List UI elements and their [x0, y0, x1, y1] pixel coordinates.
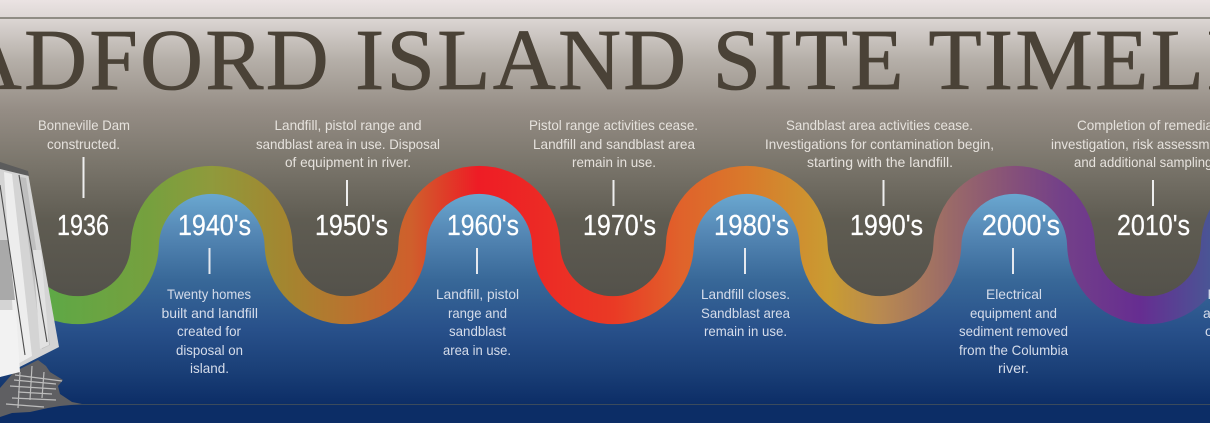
description 1970's: Landfill and sandblast area [533, 136, 695, 152]
description 1960's: range and [448, 305, 507, 321]
tick 1940's [208, 248, 210, 274]
description 1940's: created for [177, 323, 241, 339]
milestone 1950's [256, 117, 440, 242]
description 1940's: built and landfill [162, 305, 258, 321]
description 1980's: remain in use. [704, 323, 787, 339]
tick 2010's [1152, 180, 1154, 206]
tick 1970's [612, 180, 614, 206]
description 1960's: Landfill, pistol [436, 286, 519, 302]
description 1990's: Investigations for contamination begin, [765, 136, 994, 152]
dam face [0, 165, 59, 377]
tick 1936 [82, 157, 84, 198]
top rule [0, 17, 1210, 19]
milestone 1960's [436, 210, 519, 358]
description 1950's [256, 117, 440, 170]
milestone 1940's [162, 210, 258, 376]
description 1950's: Landfill, pistol range and [274, 117, 422, 133]
description 1990's: starting with the landfill. [807, 154, 953, 170]
description 2000's: sediment removed [959, 323, 1068, 339]
description 1970's [529, 117, 698, 170]
description 1970's: Pistol range activities cease. [529, 117, 698, 133]
description 1950's: sandblast area in use. Disposal [256, 136, 440, 152]
dam rubble base [0, 360, 82, 417]
description 1936: Bonneville Dam [38, 117, 130, 133]
description 1940's [162, 286, 258, 376]
dam illustration [0, 162, 82, 417]
description 2000's: equipment and [970, 305, 1057, 321]
description 1936 [38, 117, 130, 152]
description 2010's [1051, 117, 1210, 170]
description 1940's: disposal on [176, 342, 243, 358]
milestone 1980's [701, 210, 790, 339]
milestone 2010's [1051, 117, 1210, 242]
tick 1950's [346, 180, 348, 206]
waterline rule [70, 404, 1210, 405]
year 1936: 1936 [57, 210, 109, 242]
description 1980's: Landfill closes. [701, 286, 790, 302]
description 2000's: Electrical [986, 286, 1042, 302]
year 1960's: 1960's [447, 210, 519, 242]
description 2000's: from the Columbia [959, 342, 1068, 358]
milestone 1990's [765, 117, 994, 242]
timeline wave band [11, 180, 1210, 310]
description 1980's [701, 286, 790, 339]
year 1950's: 1950's [315, 210, 388, 242]
clipped next milestone text [1203, 286, 1210, 339]
tick 1990's [882, 180, 884, 206]
milestone 1936 [38, 117, 130, 242]
milestone 1970's [529, 117, 698, 242]
year 1940's: 1940's [178, 210, 251, 242]
description 1980's: Sandblast area [701, 305, 790, 321]
tick 2000's [1012, 248, 1014, 274]
year 1980's: 1980's [714, 210, 789, 242]
description 1936: constructed. [47, 136, 120, 152]
year 2010's: 2010's [1117, 210, 1190, 242]
tick 1960's [476, 248, 478, 274]
description 2000's [959, 286, 1068, 376]
year 2000's: 2000's [982, 210, 1060, 242]
description 1950's: of equipment in river. [285, 154, 411, 170]
description 1960's: sandblast [449, 323, 506, 339]
description 1940's: island. [190, 360, 229, 376]
year 1970's: 1970's [583, 210, 656, 242]
description 1960's [436, 286, 519, 358]
milestone 2000's [959, 210, 1068, 376]
description 1990's: Sandblast area activities cease. [786, 117, 973, 133]
description 1990's [765, 117, 994, 170]
tick 1980's [744, 248, 746, 274]
year 1990's: 1990's [850, 210, 923, 242]
description 1940's: Twenty homes [167, 286, 251, 302]
background: water below the wave [0, 180, 1210, 423]
description 2000's: river. [998, 360, 1029, 376]
description 1960's: area in use. [443, 342, 511, 358]
description 1970's: remain in use. [572, 154, 656, 170]
